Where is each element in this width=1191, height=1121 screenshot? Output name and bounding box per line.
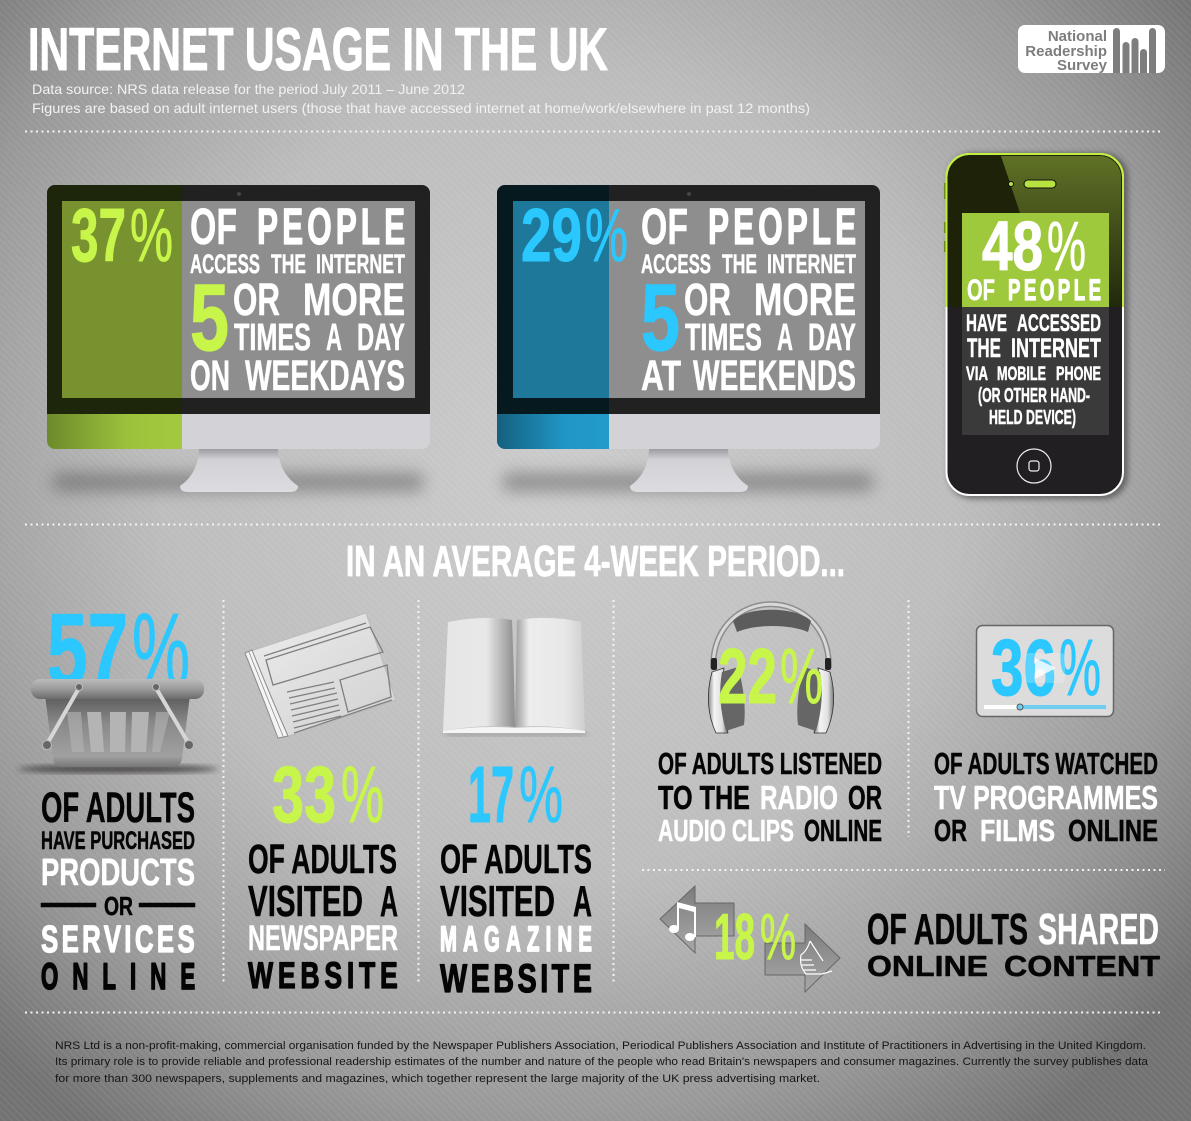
stat: 17%: %: [519, 750, 563, 839]
shared text: CONTENT: [1004, 951, 1160, 983]
icon: shopping basket: [18, 679, 218, 773]
monitor text: A: [777, 317, 793, 359]
radio text: AUDIO CLIPS: [658, 813, 794, 848]
magazine text: VISITED: [440, 877, 555, 926]
phone text: MOBILE: [997, 364, 1046, 385]
panel: tv: [934, 623, 1158, 848]
stat: 36%: %: [1059, 623, 1101, 712]
panel: radio: [658, 604, 882, 848]
monitor text: WEEKENDS: [693, 352, 856, 400]
phone home button: [1017, 449, 1051, 483]
monitor text: WEEKDAYS: [245, 352, 405, 400]
radio text: RADIO: [760, 779, 838, 816]
monitor text: 5: [190, 265, 229, 371]
monitor text: THE: [271, 249, 306, 279]
shared text: [867, 905, 1160, 983]
stat: 57%: %: [132, 593, 190, 709]
panel: mobile phone: [944, 153, 1128, 499]
monitor text: OF: [190, 198, 237, 255]
newspaper text: WEBSITE: [248, 955, 398, 996]
radio text: OR: [848, 779, 882, 816]
icon: headphones: [708, 604, 834, 733]
stat: 29%: %: [585, 193, 628, 277]
purchased text: [41, 784, 195, 997]
phone text: THE: [967, 333, 1001, 363]
shared text: OF ADULTS: [867, 905, 1028, 954]
newspaper text: OF ADULTS: [248, 836, 397, 882]
monitor text: TIMES: [685, 317, 762, 359]
phone text: PHONE: [1056, 364, 1101, 385]
newspaper text: [248, 836, 398, 996]
phone text: PEOPLE: [1008, 274, 1101, 307]
stat: 17%: 17: [468, 750, 514, 839]
data source note: [32, 81, 810, 116]
monitor text: INTERNET: [767, 249, 856, 279]
icon: newspaper: [245, 613, 396, 738]
monitor text: DAY: [357, 317, 405, 359]
stat: 18%: %: [760, 900, 796, 973]
screen: [62, 201, 415, 398]
monitor text: THE: [722, 249, 757, 279]
monitor stand: [630, 449, 748, 492]
stat: 22%: 22: [718, 632, 777, 720]
tv text: [934, 746, 1158, 848]
stat: 29%: 29: [521, 193, 582, 277]
newspaper text: VISITED: [248, 877, 363, 926]
screen: [513, 201, 865, 398]
monitor text: OR: [684, 274, 731, 325]
radio text: [658, 746, 882, 848]
monitor text: PEOPLE: [708, 198, 856, 255]
stat: 57%: [48, 613, 188, 679]
phone text: (OR OTHER HAND-: [978, 385, 1090, 407]
monitor body: [47, 185, 430, 414]
monitor text: OR: [233, 274, 280, 325]
panel: shared content: [660, 886, 1160, 992]
icon: thumbs up: [801, 941, 832, 974]
monitor text: MORE: [303, 274, 405, 325]
monitor text: 5: [641, 265, 680, 371]
monitor text: PEOPLE: [257, 198, 405, 255]
stat: 18%: 18: [714, 900, 755, 973]
data source note: Figures are based on adult internet users (those that have accessed internet at home/work/elsewhere in past 12 months): [32, 100, 810, 116]
title: INTERNET USAGE IN THE UK: [28, 16, 608, 83]
magazine text: OF ADULTS: [440, 836, 592, 882]
phone text: [966, 274, 1101, 429]
magazine text: MAGAZINE: [440, 920, 592, 960]
logo: National Readership Survey: [1018, 25, 1165, 74]
phone text: HAVE: [966, 310, 1007, 337]
monitor text: OF: [641, 198, 688, 255]
radio text: TO THE: [658, 779, 750, 816]
panel: monitor weekdays: [47, 185, 430, 492]
newspaper text: NEWSPAPER: [248, 919, 398, 958]
icon: share arrows: [660, 886, 840, 992]
phone text: HELD DEVICE): [989, 407, 1076, 429]
stat: 33%: 33: [272, 750, 336, 839]
purchased text: OR: [104, 891, 133, 921]
stat: 48%: %: [1047, 207, 1086, 285]
radio text: OF ADULTS LISTENED: [658, 746, 882, 781]
monitor text: [641, 198, 856, 400]
panel: newspaper: [245, 613, 398, 996]
stat: 57%: 57: [47, 593, 128, 709]
phone text: INTERNET: [1011, 333, 1101, 363]
stat: 48%: 48: [982, 207, 1043, 285]
purchased text: HAVE PURCHASED: [41, 827, 195, 855]
purchased text: PRODUCTS: [41, 852, 195, 894]
stat: 37%: 37: [71, 193, 126, 277]
panel: monitor weekends: [497, 185, 880, 492]
radio text: ONLINE: [804, 813, 882, 848]
logo: National Readership Survey: Readership: [1025, 43, 1107, 60]
monitor text: [190, 198, 405, 400]
panel: magazine: [440, 618, 592, 1001]
phone text: VIA: [966, 364, 988, 385]
monitor text: AT: [641, 352, 681, 400]
monitor text: MORE: [754, 274, 856, 325]
phone text: ACCESSED: [1017, 310, 1101, 337]
monitor text: TIMES: [234, 317, 311, 359]
magazine text: [440, 836, 592, 1001]
stat: 37%: %: [130, 193, 173, 277]
monitor body: [497, 185, 880, 414]
stat: 36%: 36: [991, 623, 1056, 712]
logo: National Readership Survey: Survey: [1057, 57, 1108, 74]
icon: magazine: [443, 618, 588, 736]
phone screen: [962, 213, 1109, 307]
footer note: NRS Ltd is a non-profit-making, commercial organisation funded by the Newspaper Publishers Association, Periodical Publishers Association and Institute of Practitioners in Advertising in the United Kingdom.: [55, 1040, 1146, 1052]
newspaper text: A: [380, 877, 398, 926]
stat: 22%: %: [780, 632, 823, 720]
logo: National Readership Survey: National: [1048, 28, 1107, 45]
monitor text: ACCESS: [190, 249, 260, 279]
monitor shadow: [502, 473, 874, 491]
footer note: Its primary role is to provide reliable and professional readership estimates of the number and nature of the people who read Britain's newspapers and consumer magazines. Currently the survey publishes data: [55, 1056, 1149, 1068]
stat: 33%: %: [341, 750, 384, 839]
icon: music note: [669, 902, 696, 941]
purchased text: ONLINE: [41, 956, 195, 997]
section heading: IN AN AVERAGE 4-WEEK PERIOD...: [346, 537, 845, 586]
panel: purchased online: [18, 593, 218, 997]
footer note: [55, 1040, 1149, 1085]
purchased text: SERVICES: [41, 918, 195, 960]
monitor shadow: [52, 473, 424, 491]
shared text: ONLINE: [867, 951, 988, 983]
tv text: OR: [934, 813, 967, 848]
monitor text: INTERNET: [316, 249, 405, 279]
monitor stand: [180, 449, 298, 492]
footer note: for more than 300 newspapers, supplements and magazines, which together represent the large majority of the UK press advertising market.: [55, 1073, 820, 1085]
monitor text: DAY: [808, 317, 856, 359]
monitor text: A: [326, 317, 342, 359]
phone text: OF: [967, 274, 995, 307]
phone shadow: [948, 153, 1128, 499]
tv text: ONLINE: [1068, 813, 1158, 848]
phone body: [946, 154, 1123, 495]
icon: video player: [976, 626, 1114, 716]
data source note: Data source: NRS data release for the period July 2011 – June 2012: [32, 81, 465, 97]
magazine text: A: [573, 877, 592, 926]
tv text: FILMS: [980, 813, 1055, 848]
magazine text: WEBSITE: [440, 956, 592, 1001]
purchased text: OF ADULTS: [41, 784, 195, 832]
monitor text: ACCESS: [641, 249, 711, 279]
phone speaker: [1008, 180, 1056, 188]
icon: play button: [1025, 653, 1065, 683]
phone side buttons: [944, 183, 946, 252]
monitor text: ON: [190, 352, 230, 400]
